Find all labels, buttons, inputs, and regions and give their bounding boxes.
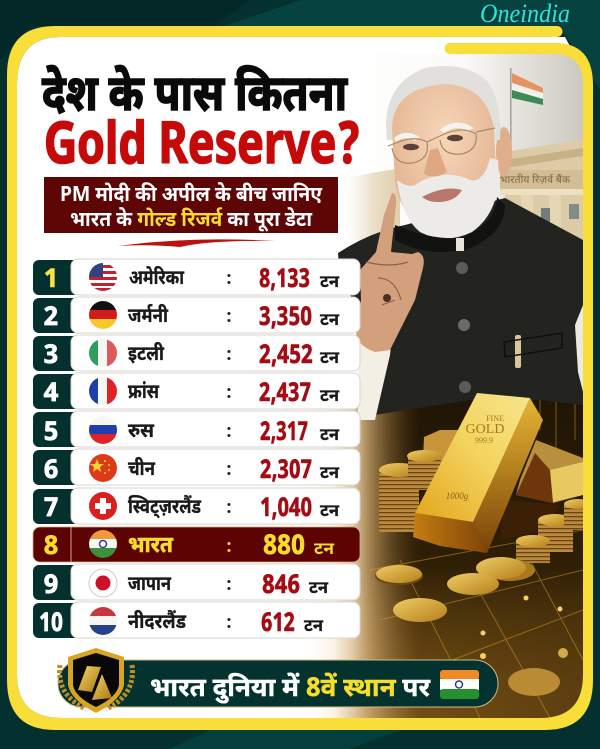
white kurta at right edge: [575, 305, 583, 392]
shield badge with gold bars: [60, 648, 132, 713]
row 4 france: :: [226, 383, 232, 406]
row 9 japan: 9: [44, 570, 58, 604]
row 7 switzerland: [33, 488, 360, 527]
row 2 germany: :: [226, 307, 232, 330]
row 8 india highlighted: 880: [263, 531, 305, 566]
row 1 america: :: [226, 269, 232, 292]
row 2 germany: [33, 297, 360, 336]
prime minister portrait: [338, 66, 583, 420]
row 10 netherlands: नीदरलैंड: [128, 609, 187, 637]
building inscription: भारतीय रिज़र्व बैंक: [500, 174, 570, 188]
lips: [422, 189, 462, 202]
eyes: [403, 144, 419, 150]
row 1 america: अमेरिका: [129, 265, 185, 293]
jacket: [338, 198, 583, 415]
gold bar engraving: [446, 414, 504, 501]
pointing hand: [356, 193, 424, 352]
white sleeve cuff: [358, 344, 391, 420]
row 3 italy: [33, 335, 360, 374]
ranking table: [33, 259, 360, 642]
row 10 netherlands: 10: [39, 608, 63, 642]
ear: [496, 127, 512, 177]
reserve bank building: [352, 139, 583, 244]
bottom rank banner: [58, 648, 498, 713]
row 4 france: 4: [44, 378, 59, 412]
title: [42, 65, 361, 187]
row 9 japan: 846: [262, 570, 300, 604]
row 4 france: टन: [320, 386, 340, 408]
row 9 japan: टन: [309, 578, 329, 600]
row 8 india highlighted: भारत: [128, 532, 173, 561]
india flag: [440, 670, 479, 699]
white beard: [397, 158, 499, 238]
red brush swoosh: [118, 239, 275, 247]
row 10 netherlands: [33, 602, 360, 642]
row 8 india highlighted: :: [226, 537, 232, 560]
eyebrows: [394, 122, 474, 142]
row 6 china: :: [226, 460, 232, 483]
row 8 india highlighted: [33, 527, 360, 566]
row 5 russia: :: [226, 422, 232, 445]
nose: [424, 148, 447, 177]
row 2 germany: जर्मनी: [128, 303, 169, 331]
gold bar engraving: 999.9: [475, 436, 493, 445]
gold bars and coins: [375, 393, 592, 622]
row 3 italy: टन: [320, 348, 340, 370]
row 7 switzerland: स्विट्ज़रलैंड: [128, 494, 201, 522]
row 6 china: टन: [320, 463, 340, 485]
sky backdrop: [464, 54, 583, 200]
row 5 russia: 2,317: [260, 417, 308, 451]
row 2 germany: 3,350: [259, 302, 312, 336]
row 1 america: 8,133: [259, 264, 310, 298]
row 4 france: फ्रांस: [128, 379, 160, 407]
gold bar engraving: GOLD: [466, 422, 504, 437]
row 2 germany: 2: [44, 302, 58, 336]
subtitle line 1: PM मोदी की अपील के बीच जानिए: [60, 182, 323, 210]
subtitle banner: [44, 177, 338, 235]
jacket buttons: [456, 262, 468, 274]
row 1 america: टन: [320, 272, 340, 294]
back gold bar: [516, 440, 583, 503]
row 6 china: 2,307: [260, 455, 312, 489]
glasses: [388, 128, 495, 163]
face: [392, 84, 496, 208]
row 8 india highlighted: टन: [314, 539, 335, 561]
row 6 china: [33, 449, 360, 489]
row 10 netherlands: :: [226, 613, 232, 636]
row 1 america: 1: [44, 264, 58, 298]
hair: [386, 66, 500, 140]
row 6 china: चीन: [128, 456, 156, 484]
gold bar engraving: 1000g: [446, 491, 469, 501]
pocket pen: [515, 335, 521, 368]
row 10 netherlands: टन: [304, 616, 324, 638]
row 7 switzerland: 1,040: [260, 493, 312, 527]
row 8 india highlighted: 8: [44, 531, 58, 565]
row 3 italy: 3: [44, 340, 58, 374]
row 4 france: 2,437: [259, 378, 311, 412]
row 1 america: [33, 259, 360, 298]
row 5 russia: रुस: [128, 420, 155, 446]
loose coins: [375, 573, 423, 585]
indian flag on pole: [510, 68, 543, 143]
row 4 france: [33, 373, 360, 412]
collar: [395, 197, 505, 252]
row 5 russia: टन: [320, 425, 340, 447]
row 7 switzerland: 7: [44, 493, 58, 527]
row 6 china: 6: [44, 455, 58, 489]
banner text: भारत दुनिया में 8वें स्थान पर: [150, 672, 431, 707]
row 5 russia: [33, 411, 360, 451]
main gold bar: [473, 398, 543, 553]
row 2 germany: टन: [320, 310, 340, 332]
gold bar engraving: FINE: [486, 414, 504, 423]
title line 2: Gold Reserve?: [44, 113, 361, 187]
coin stacks: [379, 470, 419, 532]
row 9 japan: :: [226, 575, 232, 598]
gold floor backdrop: [319, 400, 583, 718]
row 7 switzerland: :: [226, 498, 232, 521]
row 3 italy: इटली: [128, 341, 165, 369]
row 3 italy: 2,452: [259, 340, 313, 374]
row 9 japan: [33, 564, 360, 604]
subtitle line 2: भारत के गोल्ड रिजर्व का पूरा डेटा: [70, 207, 313, 235]
row 5 russia: 5: [44, 417, 58, 451]
row 10 netherlands: 612: [261, 608, 295, 642]
row 9 japan: जापान: [128, 573, 172, 599]
title line 1: देश के पास कितना: [42, 65, 348, 131]
row 7 switzerland: टन: [320, 501, 340, 523]
row 3 italy: :: [226, 345, 232, 368]
